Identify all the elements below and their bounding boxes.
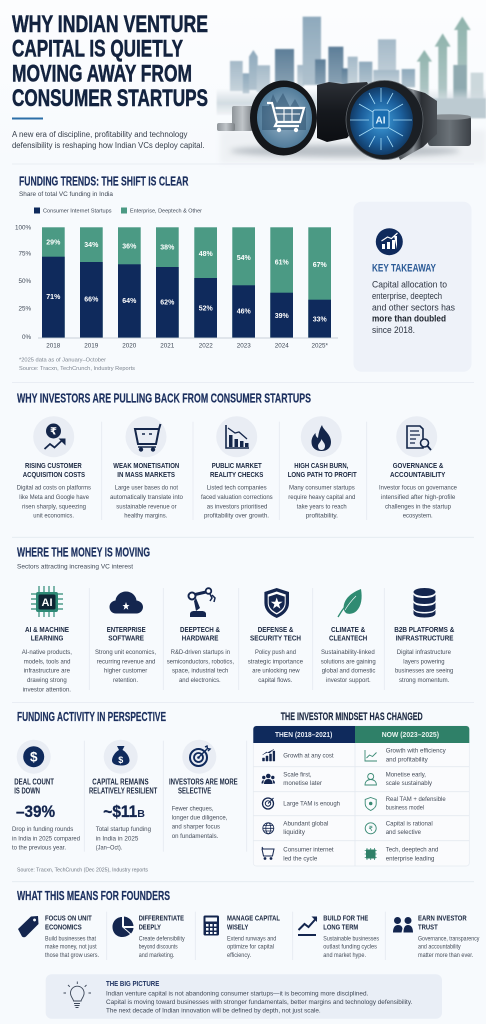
item: AI and machine learning: infrastructure are [24, 668, 70, 675]
chart footnote and source: *2025 data as of January–October [19, 358, 106, 364]
stat: capital resilient: in India in 2025 [96, 835, 139, 842]
item: rising customer acquisition costs: Digital ad costs on platforms [17, 485, 92, 492]
item: weak monetisation [110, 416, 183, 520]
legend: Enterprise, Deeptech & Other [130, 208, 202, 214]
icon: line chart [365, 750, 377, 761]
big picture heading: THE BIG PICTURE [106, 981, 160, 988]
stat: investors more selective: SELECTIVE [178, 787, 211, 796]
item: manage capital wisely: optimize for capital [227, 944, 274, 951]
icon: money bag: $ [118, 755, 123, 765]
heading: founders: WHAT THIS MEANS FOR FOUNDERS [17, 888, 170, 903]
row 1: Growth at any cost [283, 752, 334, 759]
stat: deal count: IS DOWN [14, 787, 40, 796]
icon: falling bar chart [216, 416, 257, 457]
stat: investors more selective [169, 740, 238, 840]
stacked bar chart: 34% [84, 242, 99, 249]
icon: flame [301, 416, 342, 457]
item: build for the long term [298, 913, 380, 959]
icon: team [262, 774, 275, 784]
stacked bar chart: 36% [122, 244, 137, 250]
icon: target [182, 740, 216, 774]
stat: deal count: –39% [16, 802, 55, 821]
item: enterprise software: ENTERPRISE [107, 625, 146, 634]
icon: trend arrow [298, 916, 317, 936]
item: deeptech and hardware: R&D-driven startups in [171, 649, 230, 656]
stacked bar chart: 29% [46, 240, 61, 246]
icon: price tag [18, 916, 38, 937]
row 4: Capital is rational [386, 820, 433, 827]
item: build for the long term: and market hype. [323, 952, 366, 959]
icon: rupee coin: ₹ [368, 825, 373, 833]
subtitle: defensibility is reshaping how Indian VCs deploy capital. [12, 141, 204, 150]
heading: funding activity: FUNDING ACTIVITY IN PERSPECTIVE [17, 709, 166, 724]
item: climate and cleantech [321, 589, 376, 684]
stat: deal count: DEAL COUNT [14, 777, 54, 786]
item: AI and machine learning: AI & MACHINE [25, 625, 69, 634]
icon: globe [263, 823, 274, 834]
left lens with cart [250, 80, 317, 156]
item: governance and accountability: ACCOUNTABILITY [390, 470, 445, 479]
icon: cart [262, 847, 274, 859]
heading: why investors: WHY INVESTORS ARE PULLING BACK FROM CONSUMER STARTUPS [17, 391, 311, 406]
item: public market reality checks: faced valuation corrections [201, 494, 273, 501]
item: differentiate deeply: Create defensibility [139, 935, 185, 942]
item: public market reality checks [201, 416, 273, 520]
row 3 [262, 796, 446, 812]
item: weak monetisation: sustainable revenue or [116, 503, 177, 510]
item: unit economics: make money, not just [45, 944, 97, 951]
stacked bar chart: 0% [22, 334, 32, 341]
item: governance and accountability: ecosystem. [403, 513, 433, 520]
icon: growth chart [376, 228, 403, 255]
row 3: Real TAM + defensible [386, 796, 446, 803]
stat: capital resilient: CAPITAL REMAINS [92, 777, 149, 786]
item: build for the long term: BUILD FOR THE [323, 913, 368, 922]
item: AI and machine learning: investor attention. [23, 686, 71, 693]
item: differentiate deeply [112, 913, 185, 959]
item: high cash burn: require heavy capital and [288, 494, 356, 501]
item: unit economics: ECONOMICS [45, 923, 82, 932]
stacked bar chart: 66% [84, 296, 99, 304]
item: enterprise software: retention. [113, 677, 138, 684]
section: funding activity in perspective [12, 709, 247, 874]
stat: deal count: in India in 2025 compared [12, 835, 80, 842]
item: public market reality checks: Listed tech companies [207, 485, 267, 492]
chart footnote and source: Source: Tracxn, TechCrunch, Industry Reports [19, 366, 135, 372]
stat: capital resilient: B [137, 808, 145, 820]
stacked bar chart: 39% [275, 313, 289, 320]
table header: then: THEN (2018–2021) [275, 730, 333, 739]
icon: bars growth [262, 749, 275, 761]
icon: people [393, 917, 413, 932]
stat: investors more selective: on fundamentals. [172, 833, 218, 840]
icon: light bulb [64, 982, 91, 1008]
item: rising customer acquisition costs: like Meta and Google have [19, 494, 89, 501]
item: defense and security tech: strategic importance [248, 658, 303, 665]
stacked bar chart: 54% [237, 255, 251, 262]
icon: rupee and rising arrow: ₹ [50, 426, 57, 438]
icon: AI chip: AI [42, 597, 52, 609]
item: enterprise software: recurring revenue and [97, 658, 156, 665]
item: weak monetisation: WEAK MONETISATION [113, 461, 179, 470]
row 2: scale sustainably [386, 780, 433, 787]
item: climate and cleantech: CLIMATE & [331, 625, 366, 634]
stacked bar chart: 2020 [122, 342, 137, 349]
panel: key takeaway [354, 202, 472, 372]
stat: investors more selective: Fewer cheques, [172, 805, 213, 812]
item: earn investor trust: and accountability [418, 944, 461, 951]
icon: chip [365, 848, 377, 860]
item: enterprise software: higher customer [104, 668, 148, 675]
item: public market reality checks: PUBLIC MARKET [212, 461, 262, 470]
row 2 [262, 771, 433, 787]
icon: database [414, 588, 436, 618]
item: manage capital wisely: MANAGE CAPITAL [227, 913, 280, 922]
item: rising customer acquisition costs: RISING CUSTOMER [25, 461, 82, 470]
item: high cash burn [288, 416, 357, 520]
legend: Consumer Internet Startups [43, 208, 112, 214]
item: differentiate deeply: DIFFERENTIATE [139, 913, 184, 922]
subtitle [12, 130, 204, 150]
icon: shield with star [264, 588, 289, 618]
item: climate and cleantech: Sustainability-linked [321, 649, 375, 656]
stacked bar chart: 50% [18, 278, 32, 285]
icon: dollar coin: $ [30, 750, 38, 764]
item: high cash burn: take years to reach [297, 503, 347, 510]
stacked bar chart: 2023 [237, 342, 251, 349]
item: B2B platforms and infrastructure: B2B PLATFORMS & [394, 625, 455, 634]
stat: deal count: to the previous year. [12, 845, 66, 852]
row 4: liquidity [283, 829, 306, 836]
item: governance and accountability [379, 416, 457, 520]
item: unit economics: Build businesses that [45, 935, 96, 942]
item: defense and security tech: capital flows. [258, 677, 292, 684]
chart footnote and source [19, 358, 135, 372]
stacked bar chart: 100% [15, 224, 32, 232]
big picture text: Capital is moving toward businesses with stronger fundamentals, better margins and technology defensibility. [106, 999, 412, 1006]
item: deeptech and hardware [167, 588, 234, 684]
item: weak monetisation: automatically translate into [110, 494, 183, 501]
stacked bar chart: 2019 [84, 342, 99, 349]
item: enterprise software: Strong unit economics, [95, 649, 156, 656]
item: public market reality checks: REALITY CHECKS [210, 470, 263, 479]
item: B2B platforms and infrastructure: INFRASTRUCTURE [396, 634, 453, 643]
item: weak monetisation: IN MASS MARKETS [117, 470, 175, 479]
item: build for the long term: outlast funding cycles [323, 944, 378, 951]
chart subtitle: Share of total VC funding in India [19, 191, 113, 198]
stacked bar chart: 62% [160, 300, 175, 306]
right lens with AI chip [346, 80, 423, 160]
item: unit economics: those that grow users. [45, 952, 99, 959]
stacked bar chart: 38% [160, 244, 175, 252]
stacked bar chart: 67% [313, 262, 327, 269]
stacked bar chart: 2018 [46, 342, 61, 349]
stacked bar chart: 48% [199, 251, 213, 258]
takeaway text [372, 279, 456, 335]
legend [34, 208, 202, 214]
item: climate and cleantech: investor support. [326, 677, 371, 684]
item: governance and accountability: intensified after high-profile [381, 494, 456, 501]
stacked bar chart: 2025* [311, 342, 328, 349]
stat: deal count: Drop in funding rounds [12, 826, 74, 833]
item: climate and cleantech: CLEANTECH [329, 634, 367, 643]
stacked bar chart: 2021 [160, 342, 175, 349]
icon: document with magnifier [396, 416, 437, 457]
coins left [217, 106, 253, 131]
stacked bar chart: 64% [122, 298, 137, 305]
item: B2B platforms and infrastructure: strong momentum. [399, 677, 449, 684]
right lens with AI chip: AI [376, 116, 386, 126]
item: governance and accountability: GOVERNANCE & [393, 461, 444, 470]
item: weak monetisation: Large user bases do not [115, 485, 178, 492]
item: deeptech and hardware: semiconductors, robotics, [167, 658, 234, 665]
item: climate and cleantech: solutions are gaining [321, 658, 376, 665]
icon: target [262, 798, 274, 809]
item: governance and accountability: Investor focus on governance [379, 485, 457, 492]
big picture text [106, 991, 412, 1015]
item: unit economics: FOCUS ON UNIT [45, 913, 92, 922]
icon: pie chart [112, 916, 134, 937]
item: AI and machine learning: drawing strong [27, 677, 67, 684]
heading: key takeaway: KEY TAKEAWAY [372, 263, 436, 275]
big picture text: Indian venture capital is not abandoning consumer startups—it is becoming more disciplined. [106, 991, 368, 998]
item: manage capital wisely: Extend runways and [227, 935, 277, 942]
item: public market reality checks: profitability over growth. [204, 513, 269, 520]
takeaway text: enterprise, deeptech [372, 291, 442, 301]
takeaway text: Capital allocation to [372, 279, 447, 289]
row 5: Tech, deeptech and [386, 847, 439, 854]
takeaway text: more than doubled [372, 314, 446, 324]
takeaway text: and other sectors has [372, 302, 456, 312]
item: deeptech and hardware: DEEPTECH & [180, 625, 221, 634]
stacked bar chart: 52% [199, 306, 213, 312]
item: earn investor trust: EARN INVESTOR [418, 913, 467, 922]
stat: capital resilient [89, 740, 157, 852]
row 2: Scale first, [283, 771, 312, 778]
row 2: Monetise early, [386, 771, 426, 778]
section subtitle: Sectors attracting increasing VC interest [17, 563, 133, 570]
item: high cash burn: profitability. [306, 513, 338, 520]
item: rising customer acquisition costs: ACQUISITION COSTS [23, 470, 85, 479]
icon: robot arm [188, 588, 215, 617]
stacked bar chart: 75% [18, 250, 32, 258]
row 1: Growth with efficiency [386, 748, 446, 755]
item: build for the long term: Sustainable businesses [323, 935, 380, 942]
item: differentiate deeply: and marketing. [139, 952, 175, 959]
stat: capital resilient: RELATIVELY RESILIENT [89, 787, 157, 796]
title: MOVING AWAY FROM [12, 60, 192, 88]
binocular barrels [317, 81, 437, 160]
item: defense and security tech [248, 588, 303, 684]
icon: shield [365, 798, 376, 810]
item: AI and machine learning [22, 586, 72, 693]
item: weak monetisation: healthy margins. [124, 513, 167, 520]
stacked bar chart: 2022 [199, 342, 213, 349]
item: rising customer acquisition costs [17, 416, 92, 520]
section: funding trends [15, 174, 472, 372]
icon: rupee coin [365, 823, 376, 834]
row 3: business model [386, 805, 424, 812]
hero illustration: skyline and binoculars [217, 17, 486, 163]
item: earn investor trust [393, 913, 480, 959]
panel: investor mindset table [253, 711, 469, 866]
row 4: and selective [386, 829, 421, 836]
stacked bar chart: 46% [237, 308, 251, 316]
row 4 [263, 820, 433, 836]
table header: now: NOW (2023–2025) [382, 730, 439, 739]
item: rising customer acquisition costs: unit economics. [33, 513, 74, 520]
stat: deal count [12, 740, 80, 852]
item: defense and security tech: SECURITY TECH [250, 634, 301, 643]
item: high cash burn: HIGH CASH BURN, [294, 461, 348, 470]
title: CONSUMER STARTUPS [12, 85, 208, 112]
row 5: Consumer internet [283, 847, 334, 854]
item: defense and security tech: DEFENSE & [258, 625, 294, 634]
item: B2B platforms and infrastructure [394, 588, 455, 684]
item: defense and security tech: are unlocking new [252, 668, 300, 675]
item: high cash burn: LONG PATH TO PROFIT [288, 470, 357, 479]
subtitle: A new era of discipline, profitability and technology [12, 130, 188, 139]
takeaway text: since 2018. [372, 325, 415, 335]
table header: then [253, 726, 355, 743]
item: manage capital wisely [204, 913, 280, 959]
section: where the money is moving [17, 545, 455, 693]
stacked bar chart: 71% [46, 294, 61, 301]
stacked bar chart: 33% [313, 316, 327, 324]
item: manage capital wisely: WISELY [227, 923, 248, 932]
item: enterprise software: SOFTWARE [108, 634, 144, 643]
panel: the big picture [46, 974, 442, 1019]
item: deeptech and hardware: and electronics. [179, 677, 221, 684]
row 3: Large TAM is enough [283, 800, 340, 807]
item: rising customer acquisition costs: risen sharply, squeezing [22, 503, 86, 510]
item: build for the long term: LONG TERM [323, 923, 358, 932]
stacked bar chart [15, 224, 338, 349]
stacked bar chart: 2024 [275, 342, 289, 349]
stacked bar chart: 61% [275, 260, 289, 266]
item: B2B platforms and infrastructure: businesses are seeing [395, 668, 454, 675]
row 5 [262, 847, 439, 862]
icon: cloud [110, 592, 143, 614]
title [12, 11, 208, 112]
item: deeptech and hardware: HARDWARE [182, 634, 218, 643]
table header: now [355, 726, 469, 743]
row 1: and profitability [386, 756, 428, 763]
row 1 [262, 748, 446, 763]
icon: person [365, 774, 376, 785]
item: defense and security tech: Policy push and [255, 649, 296, 656]
title: CAPITAL IS QUIETLY [12, 36, 183, 62]
stat: investors more selective: longer due diligence, [172, 814, 227, 821]
item: high cash burn: Many consumer startups [289, 485, 355, 492]
stat: capital resilient: ~$11 [103, 802, 137, 821]
item: differentiate deeply: DEEPLY [139, 923, 161, 932]
section: what this means for founders [17, 888, 480, 960]
big picture text: The next decade of Indian innovation will be defined by depth, not just scale. [106, 1008, 321, 1015]
icon: calculator [204, 916, 219, 936]
stat: capital resilient: (Jan–Oct). [96, 845, 122, 852]
stat: investors more selective: and sharper focus [172, 824, 221, 831]
item: AI and machine learning: LEARNING [31, 634, 64, 643]
source note: Source: Tracxn, TechCrunch (Dec 2025), Industry reports [17, 868, 148, 874]
row 4: Abundant global [283, 820, 329, 827]
item: earn investor trust: matter more than ever. [418, 952, 473, 959]
section: why investors are pulling back [17, 391, 457, 520]
item: earn investor trust: TRUST [418, 923, 438, 932]
stat: investors more selective: INVESTORS ARE MORE [169, 777, 238, 786]
item: manage capital wisely: efficiency. [227, 952, 251, 959]
stacked bar chart: 25% [18, 306, 32, 312]
stat: capital resilient: Total startup funding [96, 826, 151, 833]
item: B2B platforms and infrastructure: Digital infrastructure [397, 649, 451, 656]
coins right [428, 114, 471, 146]
item: deeptech and hardware: space, industrial tech [172, 668, 229, 675]
item: AI and machine learning: models, tools and [24, 658, 71, 665]
row 5: led the cycle [283, 855, 317, 862]
row 5: enterprise leading [386, 855, 435, 862]
heading: funding trends: FUNDING TRENDS: THE SHIFT IS CLEAR [19, 174, 188, 188]
item: AI and machine learning: AI-native products, [22, 649, 72, 656]
item: public market reality checks: as investors prioritised [207, 503, 268, 510]
item: differentiate deeply: beyond discounts [139, 944, 178, 951]
item: governance and accountability: challenges in the startup [385, 503, 451, 510]
row 2: monetise later [283, 780, 323, 787]
item: unit economics [18, 913, 99, 959]
icon: leaf [338, 589, 362, 617]
item: enterprise software [95, 592, 156, 684]
heading: where the money is moving: WHERE THE MONEY IS MOVING [17, 545, 150, 560]
icon: shopping cart [126, 416, 166, 457]
item: climate and cleantech: global and domestic [322, 668, 376, 675]
item: B2B platforms and infrastructure: layers powering [403, 658, 445, 665]
title: WHY INDIAN VENTURE [12, 11, 208, 38]
